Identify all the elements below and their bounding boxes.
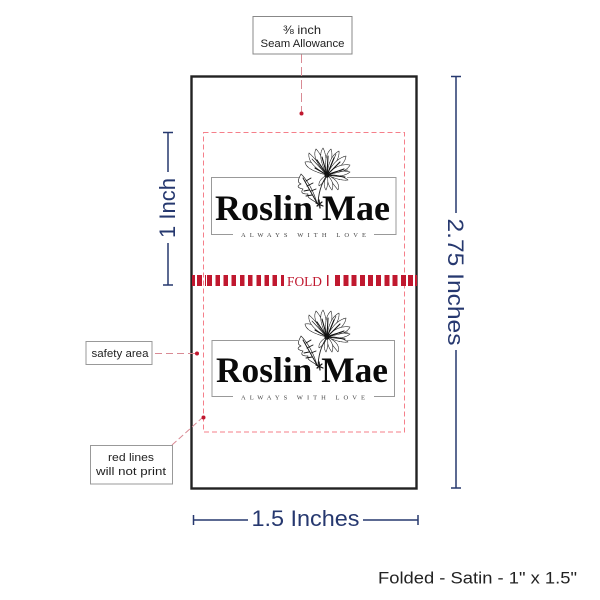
seam allowance leader [300,54,302,112]
logo tagline: top: ALWAYS WITH LOVE [241,232,366,239]
top logo [212,148,396,239]
red lines leader [172,418,202,445]
dimension: 1 inch [155,132,180,285]
fold band [192,274,417,289]
dimension: 1.5 inches [194,506,418,531]
bottom logo [212,310,394,402]
safety area leader [155,352,196,354]
1 inch text: 1 Inch [155,178,180,238]
logo frame: bottom [212,340,394,396]
fold stripes [192,275,417,286]
red lines box [90,446,172,484]
logo flower: bottom [298,310,350,370]
callout: seam allowance [253,16,352,116]
callout: red lines [90,416,206,484]
logo name: bottom: Roslin Mae [216,350,388,390]
seam allowance dot [300,112,304,116]
2.75 inches text: 2.75 Inches [443,218,468,346]
1 inch lines [163,132,173,285]
2.75 inches lines [451,76,461,488]
fold text: FOLD [287,274,322,289]
logo name: top: Roslin Mae [215,188,390,228]
safety area dashed border [204,132,404,432]
logo tagline: bottom: ALWAYS WITH LOVE [241,394,365,402]
red lines text: red lines [108,452,155,464]
red lines dot [202,416,206,420]
callout: safety area [86,342,199,364]
logo frame: top [212,178,396,234]
safety area text: safety area [92,348,149,360]
seam allowance text: ⅜ inch [283,23,321,37]
seam allowance text line 2: Seam Allowance [260,38,344,50]
red lines text line 2: will not print [95,466,166,478]
1.5 inches text: 1.5 Inches [252,506,360,531]
label outline [192,76,416,488]
safety area dot [195,352,199,356]
logo flower: top [298,148,350,208]
1.5 inches lines [194,515,418,525]
caption: Folded - Satin - 1" x 1.5" [378,568,577,588]
dimension: 2.75 inches [443,76,468,488]
seam allowance box [253,16,352,54]
safety area box [86,342,152,364]
